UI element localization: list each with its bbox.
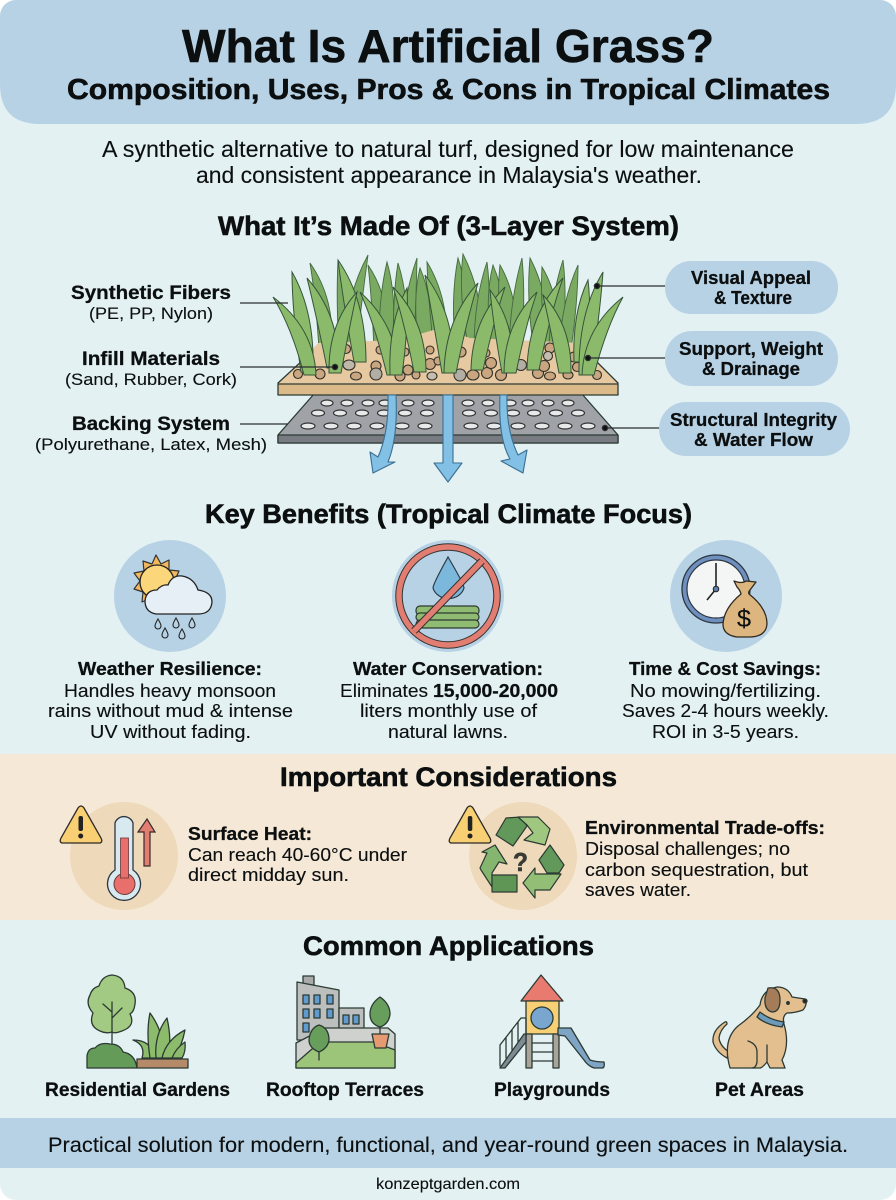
- callout pills: Visual Appeal: [691, 268, 811, 288]
- title: What Is Artificial Grass?: [182, 20, 714, 72]
- text: surface heat: direct midday sun.: [188, 864, 349, 885]
- icon: no water: [392, 540, 504, 652]
- infill layer: [278, 328, 618, 395]
- benefit: weather resilience: [48, 658, 293, 742]
- left layer labels: Synthetic Fibers: [71, 282, 231, 304]
- benefit: time and cost savings: Time & Cost Savings:: [629, 658, 821, 679]
- intro text: A synthetic alternative to natural turf, designed for low maintenance: [102, 136, 794, 162]
- icon: sun, cloud and rain: [114, 540, 226, 652]
- left layer labels: Infill Materials: [82, 348, 220, 370]
- intro text: [102, 136, 794, 188]
- benefit: water conservation: 15,000-20,000: [433, 680, 558, 701]
- application labels: Playgrounds: [494, 1080, 610, 1101]
- application labels: Residential Gardens: [45, 1080, 230, 1101]
- website credit: konzeptgarden.com: [376, 1176, 520, 1193]
- subtitle: Composition, Uses, Pros & Cons in Tropical Climates: [67, 74, 830, 106]
- heading: common applications: Common Applications: [303, 931, 594, 961]
- callout pills: [659, 261, 850, 456]
- left layer labels: Backing System: [72, 413, 230, 435]
- text: surface heat: Can reach 40-60°C under: [188, 844, 407, 865]
- left layer labels: [35, 282, 267, 454]
- text: environmental trade-offs: Disposal challenges; no: [585, 838, 790, 859]
- application labels: Pet Areas: [715, 1080, 804, 1101]
- application labels: Rooftop Terraces: [266, 1080, 424, 1101]
- callout pills: Structural Integrity: [670, 410, 837, 430]
- icon: recycling with warning: ?: [513, 847, 528, 877]
- front grass blades: [273, 260, 623, 375]
- application labels: [45, 1080, 804, 1101]
- benefit: time and cost savings: No mowing/fertilizing.: [630, 680, 821, 701]
- left layer labels: (Sand, Rubber, Cork): [65, 370, 237, 389]
- callout pills: & Water Flow: [694, 430, 814, 450]
- water flow arrows: [370, 395, 527, 482]
- benefit: water conservation: liters monthly use of: [360, 700, 538, 721]
- heading: what it's made of: What It’s Made Of (3-Layer System): [218, 211, 679, 241]
- heading: key benefits: Key Benefits (Tropical Climate Focus): [205, 499, 692, 529]
- icon: dog: [713, 987, 807, 1068]
- footer banner: Practical solution for modern, functional, and year-round green spaces in Malaysia.: [48, 1133, 848, 1157]
- leader lines: [240, 283, 665, 431]
- text: surface heat: [188, 823, 407, 885]
- layer diagram: [273, 254, 623, 482]
- callout pills: Support, Weight: [679, 339, 823, 359]
- benefit: time and cost savings: ROI in 3-5 years.: [652, 721, 799, 742]
- left layer labels: (Polyurethane, Latex, Mesh): [35, 435, 267, 454]
- text: environmental trade-offs: carbon sequestration, but: [585, 859, 808, 880]
- heading: important considerations: Important Considerations: [280, 762, 617, 792]
- icon: rooftop terraces: [296, 976, 395, 1068]
- text: surface heat: Surface Heat:: [188, 823, 312, 844]
- benefit: water conservation: Eliminates: [340, 680, 428, 701]
- benefit: water conservation: natural lawns.: [388, 721, 508, 742]
- icon: thermometer with warning: [60, 802, 178, 910]
- left layer labels: (PE, PP, Nylon): [89, 304, 213, 323]
- icon: residential gardens: [87, 975, 188, 1068]
- backing layer: [278, 394, 618, 443]
- icon: playground: [500, 975, 604, 1068]
- benefit: time and cost savings: [622, 658, 829, 742]
- callout pills: & Texture: [714, 288, 792, 308]
- icon: clock and money bag: $: [737, 605, 751, 633]
- icon: recycling with warning: [449, 802, 577, 910]
- text: environmental trade-offs: saves water.: [585, 879, 691, 900]
- back grass blades: [310, 254, 578, 350]
- benefit: weather resilience: rains without mud & intense: [48, 700, 293, 721]
- panel: important considerations: [0, 754, 896, 920]
- benefit: water conservation: [340, 658, 558, 742]
- text: environmental trade-offs: [585, 817, 825, 900]
- text: environmental trade-offs: Environmental Trade-offs:: [585, 817, 825, 838]
- benefit: weather resilience: Handles heavy monsoon: [64, 680, 276, 701]
- benefit: weather resilience: Weather Resilience:: [78, 658, 262, 679]
- intro text: and consistent appearance in Malaysia's weather.: [196, 162, 702, 188]
- benefit: weather resilience: UV without fading.: [90, 721, 251, 742]
- header banner: [0, 0, 896, 124]
- benefit: time and cost savings: Saves 2-4 hours weekly.: [622, 700, 829, 721]
- benefit: water conservation: Water Conservation:: [353, 658, 543, 679]
- callout pills: & Drainage: [702, 359, 800, 379]
- footer banner: [0, 1118, 896, 1168]
- icon: clock and money bag: [670, 540, 782, 652]
